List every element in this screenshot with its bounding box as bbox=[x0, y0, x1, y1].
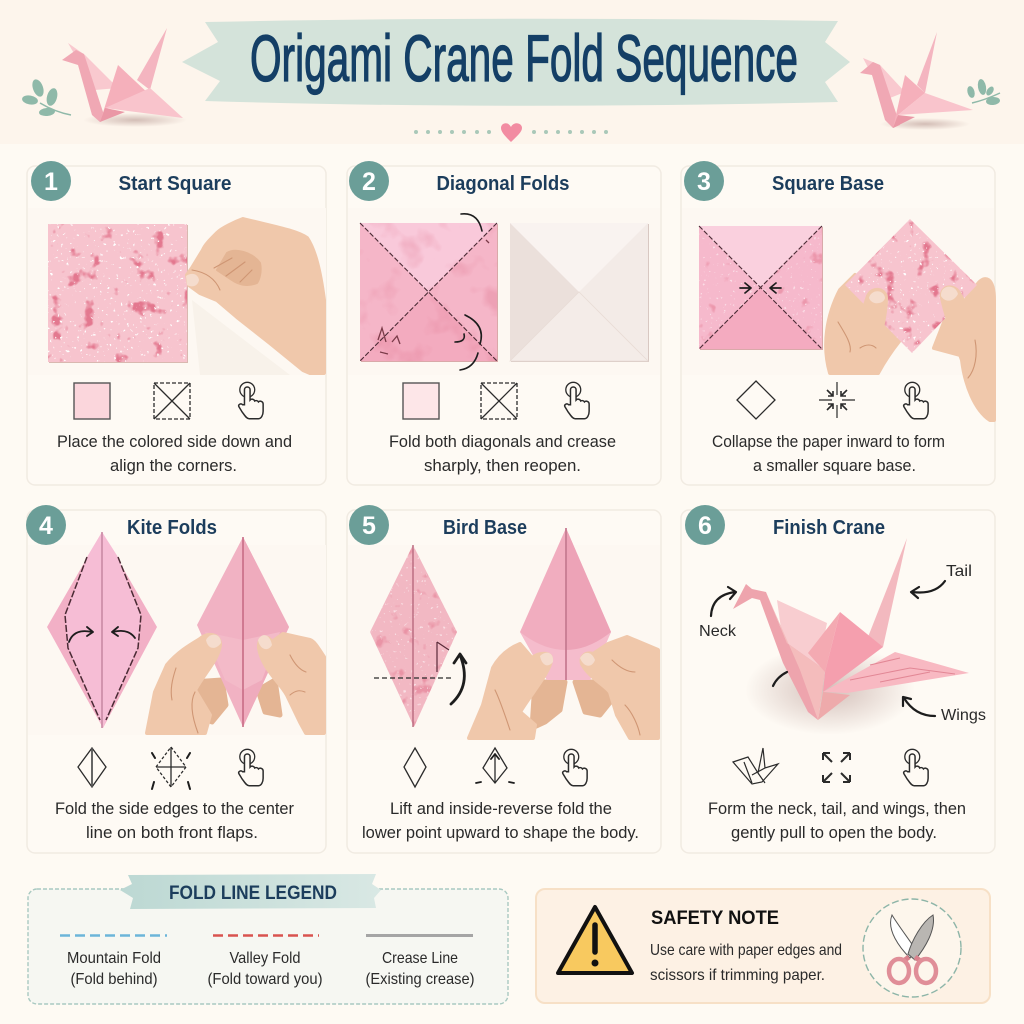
icon: square bbox=[403, 383, 439, 419]
mountain fold bbox=[60, 936, 167, 988]
arrow: neck: Neck bbox=[699, 623, 737, 640]
pink paper with diagonals bbox=[360, 223, 498, 362]
caption: Form the neck, tail, and wings, then bbox=[708, 799, 966, 818]
arrow: neck bbox=[699, 587, 737, 640]
icon: expand arrows bbox=[823, 753, 850, 782]
arrow: wings: Wings bbox=[941, 707, 986, 724]
crease line: Crease Line bbox=[382, 950, 458, 967]
caption: Collapse the paper inward to form bbox=[712, 432, 945, 451]
photo background bbox=[348, 545, 660, 740]
left thumb bbox=[838, 290, 886, 373]
icon: diamond bbox=[737, 381, 775, 419]
right thumb and wrist bbox=[941, 287, 994, 420]
icon: inward arrows bbox=[819, 382, 855, 418]
arrow: tail bbox=[911, 563, 972, 598]
caption: Fold both diagonals and crease bbox=[389, 432, 616, 451]
heading: Square Base bbox=[772, 173, 884, 195]
crane illustration left bbox=[62, 28, 187, 127]
panel: step 6 bbox=[681, 505, 995, 853]
fingers behind base bbox=[532, 682, 612, 728]
folded kite bbox=[197, 537, 289, 727]
photo background bbox=[348, 208, 660, 375]
badge 6: 6 bbox=[698, 512, 712, 540]
panel: step 5 bbox=[347, 505, 661, 853]
mountain fold: Mountain Fold bbox=[67, 950, 161, 967]
right hand bbox=[258, 634, 324, 733]
panel: step 4 bbox=[26, 505, 326, 853]
badge 2: 2 bbox=[362, 168, 376, 196]
badge 1: 1 bbox=[44, 168, 58, 196]
icon: tap bbox=[904, 382, 928, 419]
mountain fold: (Fold behind) bbox=[70, 971, 158, 988]
paper with collapse folds bbox=[699, 226, 823, 350]
fold arrows bbox=[455, 214, 482, 370]
caption: a smaller square base. bbox=[753, 456, 916, 475]
icon: warning triangle bbox=[558, 907, 632, 973]
arrow: tail: Tail bbox=[946, 563, 972, 580]
arrow: wings bbox=[903, 697, 986, 724]
icon: crane outline bbox=[733, 748, 778, 784]
icon: tap bbox=[239, 749, 263, 786]
heading: Start Square bbox=[118, 173, 232, 195]
panel: step 3 bbox=[681, 161, 995, 485]
photo background bbox=[28, 208, 326, 375]
badge 4 bbox=[26, 505, 66, 545]
icon: narrow diamond bbox=[404, 748, 426, 787]
caption: sharply, then reopen. bbox=[424, 456, 581, 475]
valley fold: Valley Fold bbox=[230, 950, 300, 967]
icon: tap bbox=[563, 749, 587, 786]
crease line bbox=[366, 936, 474, 988]
patterned kite bbox=[370, 545, 457, 727]
photo background bbox=[682, 208, 994, 375]
crease mark bbox=[773, 672, 787, 686]
panel: fold line legend bbox=[28, 874, 508, 1004]
icon: square bbox=[74, 383, 110, 419]
caption: Fold the side edges to the center bbox=[55, 799, 294, 818]
badge 4: 4 bbox=[39, 512, 53, 540]
leaves left bbox=[21, 78, 71, 117]
valley fold: (Fold toward you) bbox=[208, 971, 322, 988]
heading: Bird Base bbox=[443, 517, 527, 539]
badge 3 bbox=[684, 161, 724, 201]
legend heading ribbon: FOLD LINE LEGEND bbox=[169, 883, 337, 904]
badge 3: 3 bbox=[697, 168, 711, 196]
crease line: (Existing crease) bbox=[366, 971, 474, 988]
patterned diamond bbox=[845, 219, 977, 353]
icon: reverse fold bbox=[476, 748, 514, 783]
divider with heart bbox=[414, 123, 608, 142]
hands behind diamond bbox=[826, 275, 994, 373]
left hand bbox=[469, 644, 553, 738]
title banner bbox=[182, 19, 850, 106]
caption: lower point upward to shape the body. bbox=[362, 823, 639, 842]
caption: align the corners. bbox=[110, 456, 237, 475]
header background bbox=[0, 0, 1024, 144]
icon: tap bbox=[239, 382, 263, 419]
fingers behind kite bbox=[192, 680, 280, 722]
badge 6 bbox=[685, 505, 725, 545]
panel: safety note bbox=[536, 889, 990, 1003]
caption: gently pull to open the body. bbox=[731, 823, 937, 842]
caption: Place the colored side down and bbox=[57, 432, 292, 451]
patterned paper bbox=[48, 224, 188, 363]
caption: Lift and inside-reverse fold the bbox=[390, 799, 612, 818]
icon: narrow diamond bbox=[78, 748, 106, 787]
lift arrow bbox=[451, 654, 466, 704]
kite with fold lines bbox=[47, 532, 157, 728]
badge 5: 5 bbox=[362, 512, 376, 540]
safety text: scissors if trimming paper. bbox=[650, 967, 825, 984]
panel: step 1 bbox=[27, 161, 326, 485]
panel: step 2 bbox=[347, 161, 661, 485]
photo background bbox=[28, 545, 326, 735]
finished crane bbox=[733, 538, 969, 735]
safety heading: SAFETY NOTE bbox=[651, 908, 779, 929]
icon: tap bbox=[904, 749, 928, 786]
safety text: Use care with paper edges and bbox=[650, 942, 842, 959]
hand bbox=[186, 219, 324, 375]
badge 2 bbox=[349, 161, 389, 201]
icon: kite folds bbox=[152, 747, 190, 789]
badge 5 bbox=[349, 505, 389, 545]
icon: scissors bbox=[863, 899, 961, 997]
legend heading ribbon bbox=[120, 874, 381, 909]
bird base bbox=[520, 528, 611, 680]
badge 1 bbox=[31, 161, 71, 201]
leaves right bbox=[966, 78, 1000, 106]
left hand bbox=[147, 635, 221, 733]
white paper bbox=[510, 223, 649, 362]
heading: Kite Folds bbox=[127, 517, 217, 539]
icon: dashed square bbox=[481, 383, 517, 419]
icon: dashed square bbox=[154, 383, 190, 419]
icon: tap bbox=[565, 382, 589, 419]
heading: Finish Crane bbox=[773, 517, 885, 539]
right hand bbox=[580, 637, 658, 738]
crane illustration right bbox=[860, 32, 973, 130]
heading: Diagonal Folds bbox=[436, 173, 570, 195]
valley fold bbox=[208, 936, 322, 988]
caption: line on both front flaps. bbox=[86, 823, 258, 842]
banner ribbon bbox=[182, 19, 850, 106]
